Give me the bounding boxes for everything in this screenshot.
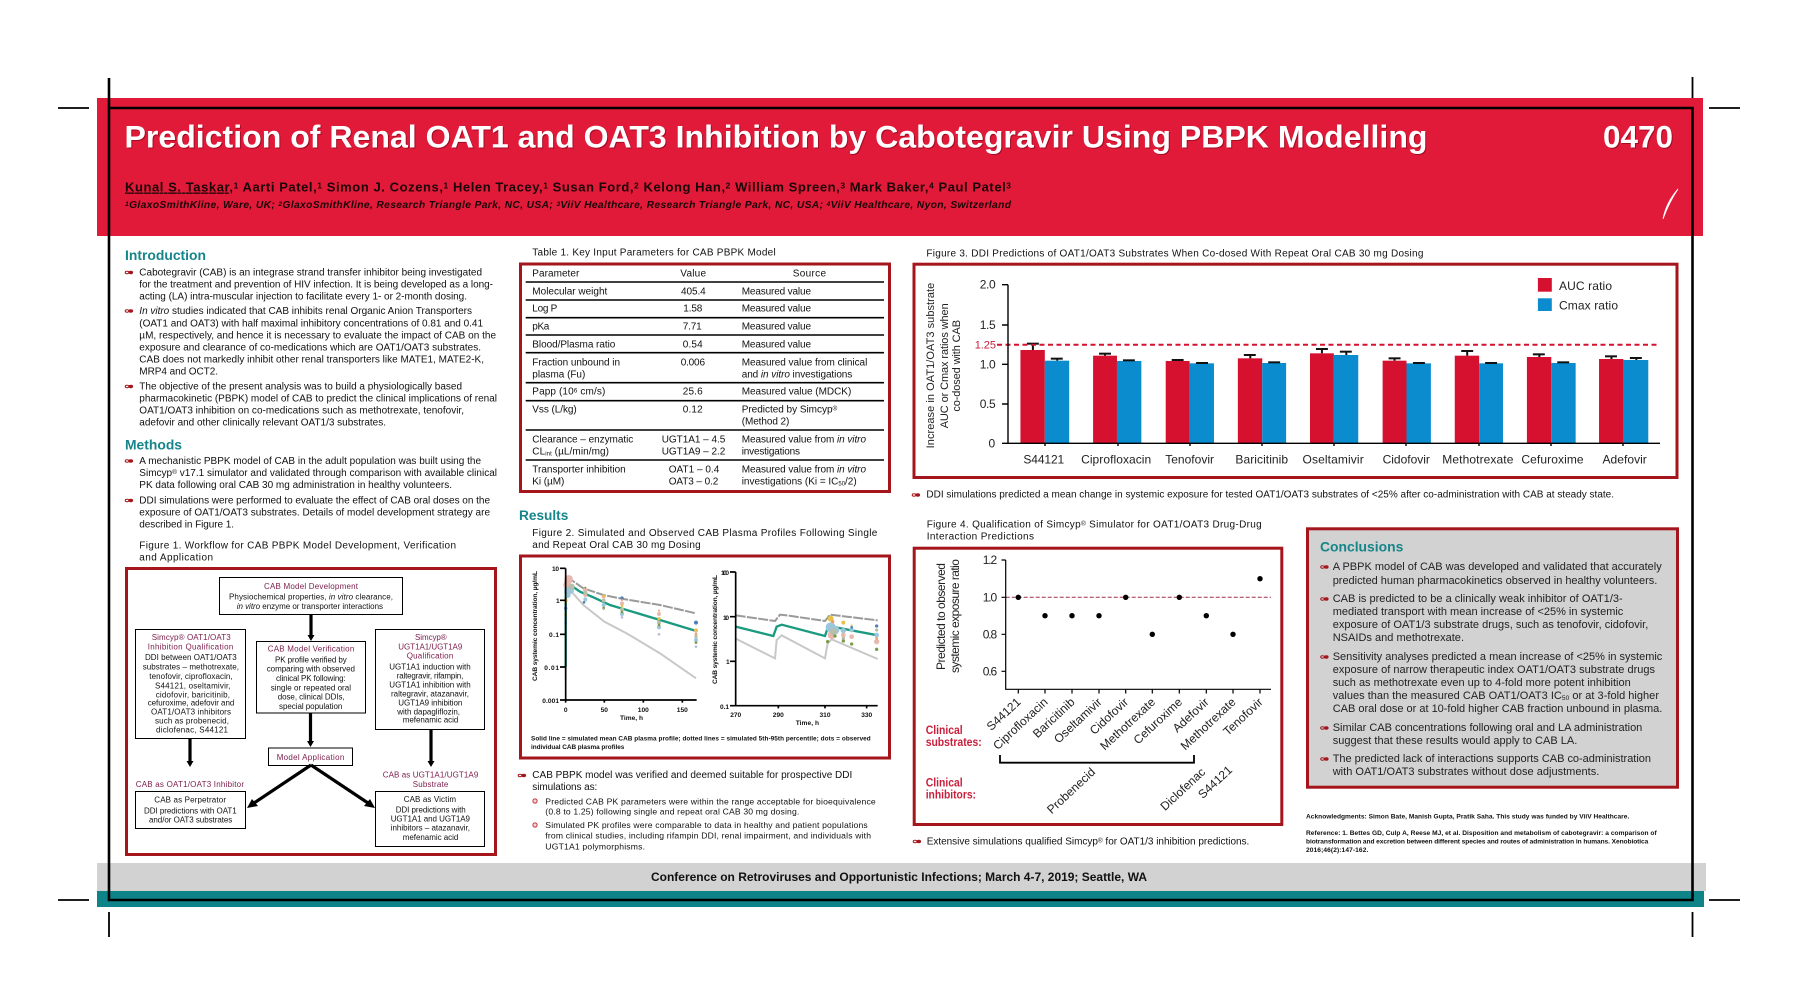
y axis tick labels: 10 [552, 566, 559, 573]
y axis tick labels: 0.1 [549, 632, 559, 639]
table rows: Transporter inhibition [532, 465, 626, 476]
header band [97, 98, 1703, 236]
table rows: Measured value [742, 322, 811, 333]
references [1306, 830, 1657, 854]
panel: table 1 key input parameters [520, 264, 890, 492]
figure 1 caption [139, 541, 456, 564]
data points: repeat dose [826, 616, 879, 651]
panel: conclusions: mediated transport with mean increase of <25% in systemic [1333, 606, 1624, 618]
x axis tick labels: 270 [730, 712, 742, 719]
y axis tick labels: 0.8 [983, 627, 998, 641]
box: Simcyp OAT qualification: Simcyp® OAT1/OAT3 [152, 633, 231, 642]
table rows: 0.006 [681, 358, 705, 369]
y axis tick labels: 0 [988, 436, 996, 450]
label: CAB as substrate: Substrate [413, 780, 449, 789]
panel: introduction: pharmacokinetic (PBPK) model of CAB to predict the clinical implications of renal [139, 393, 497, 404]
panel: conclusions: predicted human pharmacokinetics observed in healthy volunteers. [1333, 575, 1657, 587]
y axis tick labels: 0.01 [544, 665, 559, 672]
box: Simcyp OAT qualification: S44121, oseltamivir, [155, 681, 231, 690]
legend [1538, 278, 1618, 312]
line: 5th percentile [736, 635, 878, 659]
data points [1016, 576, 1263, 637]
box: CAB as perpetrator: DDI predictions with OAT1 [144, 806, 237, 815]
panel: conclusions: suggest that these results would apply to CAB LA. [1333, 735, 1577, 747]
line: simulated mean [736, 625, 878, 636]
box: Simcyp UGT qualification: UGT1A9 inhibition [398, 698, 462, 707]
x axis category labels [1023, 452, 1647, 466]
box: CAB model verification: dose, clinical DDIs, [278, 693, 345, 702]
panel: conclusions: such as methotrexate even up to 4-fold more potent inhibition [1333, 677, 1631, 689]
panel: conclusions: with OAT1/OAT3 substrates without dose adjustments. [1332, 766, 1599, 778]
panel: conclusions: NSAIDs and methotrexate. [1333, 632, 1464, 644]
panel: conclusions: CAB is predicted to be a clinically weak inhibitor of OAT1/3- [1333, 593, 1623, 605]
line: 5th percentile [566, 585, 696, 680]
box: CAB as perpetrator: and/or OAT3 substrates [149, 816, 232, 825]
table rows: 0.12 [683, 405, 703, 416]
chart: repeat dose profile [712, 570, 879, 727]
x axis tick labels [564, 707, 688, 722]
box: Simcyp UGT qualification: UGT1A1 inhibition with [389, 681, 471, 690]
x axis tick labels: 100 [638, 707, 649, 714]
table rows: CLint (µL/min/mg) [532, 447, 609, 458]
references: biotransformation and excretion between different species and routes of administration in humans. Xenobiotica [1306, 838, 1649, 845]
line: simulated mean [566, 582, 695, 667]
table rows: Clearance – enzymatic [532, 435, 633, 446]
box: Simcyp UGT qualification [376, 630, 484, 730]
y axis tick labels: 1 [726, 659, 730, 666]
panel: methods: exposure of OAT1/OAT3 substrates. Details of model development strategy are [139, 507, 490, 518]
box: CAB model verification: PK profile verified by [275, 656, 347, 665]
authors: Kunal S. Taskar,1 Aarti Patel,1 Simon J. Cozens,1 Helen Tracey,1 Susan Ford,2 Kelong Han,2 William Spreen,3 Mark Baker,4 Paul Patel3 [125, 180, 1011, 194]
x axis category labels: Adefovir [1602, 452, 1647, 466]
clinical substrate labels: Adefovir [1170, 695, 1212, 735]
x axis category labels: Oseltamivir [1302, 452, 1364, 466]
sub-bullet: bioequivalence: (0.8 to 1.25) following single and repeat oral CAB 30 mg dosing. [545, 807, 799, 817]
label: CAB as substrate: CAB as UGT1A1/UGT1A9 [383, 771, 479, 780]
chart: single dose profile [532, 566, 698, 722]
poster number: 0470 [1603, 118, 1673, 154]
box: Simcyp UGT qualification: with dapagliflozin, [396, 707, 460, 716]
box: CAB model verification [256, 642, 366, 713]
title: Prediction of Renal OAT1 and OAT3 Inhibition by Cabotegravir Using PBPK Modelling [124, 118, 1428, 154]
acknowledgments: Acknowledgments: Simon Bate, Manish Gupta, Pratik Saha. This study was funded by ViiV Healthcare. [1306, 814, 1629, 821]
panel: introduction: CAB does not markedly inhibit other renal transporters like MATE1, MATE2-K, [139, 354, 484, 365]
panel: conclusions: values than the measured CAB OAT1/OAT3 IC50 or at 3-fold higher [1333, 690, 1659, 702]
text block: results bullets [518, 770, 876, 851]
x axis tick labels: 150 [677, 707, 688, 714]
y axis tick labels: 1.5 [980, 318, 996, 332]
box: Simcyp OAT qualification: Inhibition Qualification [148, 642, 233, 651]
box: model application: Model Application [277, 753, 344, 762]
legend: Cmax ratio [1559, 298, 1618, 312]
heading: conclusions: Conclusions [1320, 540, 1403, 555]
label: CAB as inhibitor: CAB as OAT1/OAT3 Inhibitor [136, 780, 244, 789]
references: Reference: 1. Bettes GD, Culp A, Reese MJ, et al. Disposition and metabolism of cabotegravir: a comparison of [1306, 830, 1657, 837]
threshold line 1.25 [997, 344, 1660, 346]
y axis tick labels: 1.0 [983, 590, 998, 604]
y axis title: co-dosed with CAB [951, 320, 963, 412]
references: 2016;46(2):147-162. [1306, 847, 1368, 854]
table header: Parameter [532, 269, 580, 280]
panel: figure 4 dot plot [914, 548, 1282, 824]
table rows: Molecular weight [532, 287, 608, 298]
y axis tick labels: 0.6 [983, 664, 998, 678]
page frame and crop marks [58, 77, 1740, 937]
x axis tick labels: 330 [861, 712, 873, 719]
panel: introduction: for the treatment and prevention of HIV infection. It is being developed as a long- [139, 279, 493, 290]
table rows: OAT1 – 0.4 [669, 465, 720, 476]
sub-bullet: bioequivalence: Predicted CAB PK parameters were within the range acceptable for bioequivalence [545, 797, 876, 807]
y axis tick labels: 10 [723, 615, 729, 622]
x axis category labels: Cidofovir [1383, 452, 1430, 466]
box: CAB model development: CAB Model Development [264, 582, 359, 591]
x axis tick labels [730, 712, 873, 727]
box: Simcyp OAT qualification: DDI between OAT1/OAT3 [145, 653, 237, 662]
table rows: Measured value (MDCK) [742, 387, 851, 398]
x axis category labels: Baricitinib [1235, 452, 1288, 466]
figure 1 caption: Figure 1. Workflow for CAB PBPK Model Development, Verification [139, 541, 456, 552]
y axis title: systemic exposure ratio [948, 559, 962, 673]
x axis category labels: S44121 [1023, 452, 1065, 466]
clinical inhibitor labels: S44121 [1195, 763, 1235, 801]
heading: clinical substrates [926, 725, 982, 749]
y axis tick labels: 0.1 [720, 704, 729, 711]
heading: clinical inhibitors: Clinical [926, 778, 963, 790]
box: Simcyp OAT qualification: OAT1/OAT3 inhibitors [151, 708, 231, 716]
line: 95th percentile [736, 615, 878, 621]
figure 4 caption [927, 519, 1262, 543]
x axis category labels: Cefuroxime [1521, 452, 1584, 466]
box: Simcyp UGT qualification: raltegravir, rifampin, [397, 672, 463, 681]
heading: methods: Methods [125, 437, 182, 452]
box: CAB as victim [376, 792, 484, 846]
clinical substrate labels: Tenofovir [1220, 695, 1266, 738]
sub-bullet: bioequivalence [533, 797, 876, 817]
y axis title: CAB systemic concentration, µg/mL [532, 571, 539, 681]
table rows: pKa [532, 322, 550, 333]
box: CAB as perpetrator [136, 792, 246, 828]
chart footnote: Solid line = simulated mean CAB plasma profile; dotted lines = simulated 5th-95th percentile; dots = observed [531, 736, 871, 743]
y axis tick labels [975, 278, 996, 450]
box: Simcyp OAT qualification: such as probenecid, [155, 716, 229, 726]
table rows: and in vitro investigations [742, 370, 852, 381]
table rows: UGT1A1 – 4.5 [662, 435, 726, 446]
y axis title [925, 283, 963, 448]
y axis title [934, 559, 962, 673]
y axis title: Predicted to observed [934, 563, 948, 670]
panel: methods: PK data following oral CAB 30 mg administration in healthy volunteers. [139, 480, 452, 491]
panel: introduction: exposure and clearance of co-medications which are OAT1/OAT3 substrates. [139, 342, 481, 353]
box: CAB model development: in vitro enzyme or transporter interactions [237, 602, 383, 611]
axes [1002, 285, 1660, 446]
box: Simcyp OAT qualification [136, 630, 246, 738]
panel: introduction: (OAT1 and OAT3) with half maximal inhibitory concentrations of 0.81 and 0.41 [139, 318, 483, 329]
clinical inhibitor labels [1044, 763, 1235, 817]
table rows: Vss (L/kg) [532, 405, 577, 416]
panel: conclusions: exposure of OAT1/3 substrate drugs, such as tenofovir, cidofovir, [1333, 619, 1648, 631]
box: CAB model verification: single or repeated oral [271, 683, 351, 692]
y axis tick labels [542, 566, 560, 705]
text block: figure 3 takeaway: DDI simulations predicted a mean change in systemic exposure for tested OAT1/OAT3 substrates of <25% after co-administration with CAB at steady state. [926, 490, 1614, 501]
y axis tick labels [983, 553, 998, 678]
icon: logo swoosh [1663, 189, 1678, 219]
figure 2 caption [532, 528, 878, 551]
box: CAB model development: Physiochemical properties, in vitro clearance, [229, 592, 393, 601]
table rows: 0.54 [683, 340, 703, 351]
x axis tick labels: 310 [819, 712, 831, 719]
table rows: Measured value from in vitro [742, 435, 866, 446]
y axis tick labels: 2.0 [980, 278, 996, 292]
affiliations: 1GlaxoSmithKline, Ware, UK; 2GlaxoSmithKline, Research Triangle Park, NC, USA; 3ViiV Healthcare, Research Triangle Park, NC, USA; 4ViiV Healthcare, Nyon, Switzerland [125, 200, 1012, 211]
figure 4 caption: Interaction Predictions [927, 532, 1034, 543]
box: CAB as victim: inhibitors – atazanavir, [391, 824, 470, 833]
x axis tick labels: 290 [773, 712, 784, 719]
heading: clinical substrates: substrates: [926, 737, 982, 749]
table rows: Measured value [742, 340, 811, 351]
clinical substrate labels: S44121 [984, 695, 1024, 733]
heading: results: Results [519, 508, 568, 523]
y axis tick labels: 1.0 [980, 357, 996, 371]
panel: figure 3 bar chart [914, 264, 1677, 478]
x axis tick labels: Time, h [796, 720, 819, 727]
text block: figure 4 takeaway: Extensive simulations qualified Simcyp® for OAT1/3 inhibition predictions. [927, 836, 1249, 847]
panel: figure 2 plasma profiles [520, 556, 890, 758]
panel: conclusions: Similar CAB concentrations following oral and LA administration [1333, 722, 1642, 734]
box: CAB model verification: comparing with observed [267, 665, 355, 674]
y axis tick labels: 100 [721, 570, 729, 577]
panel: introduction: In vitro studies indicated that CAB inhibits renal Organic Anion Transporters [139, 306, 472, 317]
panel: conclusions: Sensitivity analyses predicted a mean increase of <25% in systemic [1333, 651, 1663, 663]
table rows: Log P [532, 304, 558, 315]
panel: methods: DDI simulations were performed to evaluate the effect of CAB oral doses on the [139, 495, 490, 506]
x axis tick labels: Time, h [620, 715, 643, 722]
table rows: Measured value [742, 287, 811, 298]
panel: conclusions: A PBPK model of CAB was developed and validated that accurately [1333, 561, 1662, 573]
y axis title: CAB systemic concentration, µg/mL [712, 575, 719, 684]
box: CAB model development [220, 578, 402, 614]
box: CAB as victim: mefenamic acid [403, 833, 458, 842]
table header: Source [793, 269, 826, 280]
panel: methods: described in Figure 1. [139, 519, 234, 530]
panel: methods: Simcyp® v17.1 simulator and validated through comparison with available clinical [139, 468, 497, 479]
box: Simcyp UGT qualification: mefenamic acid [403, 716, 458, 725]
line: 95th percentile [567, 577, 696, 613]
panel: introduction: Cabotegravir (CAB) is an integrase strand transfer inhibitor being investigated [139, 267, 482, 278]
table 1 caption: Table 1. Key Input Parameters for CAB PBPK Model [532, 248, 776, 259]
panel: conclusions: CAB oral dose or at 10-fold higher CAB fraction unbound in plasma. [1333, 703, 1662, 715]
axes [560, 568, 697, 703]
box: CAB model verification: clinical PK following: [276, 674, 346, 683]
footer band: teal [97, 891, 1704, 907]
figure 2 caption: and Repeat Oral CAB 30 mg Dosing [532, 540, 701, 551]
panel: methods: A mechanistic PBPK model of CAB in the adult population was built using the [139, 456, 481, 467]
footer band: grey [97, 863, 1706, 891]
box: CAB model verification: CAB Model Verification [268, 645, 354, 654]
arrows: workflow connectors [186, 614, 434, 808]
y axis tick labels [720, 570, 730, 711]
x axis tick labels: 50 [601, 707, 608, 714]
clinical substrate labels: Oseltamivir [1051, 695, 1105, 746]
sub-bullet: simulated profiles: Simulated PK profiles were comparable to data in healthy and patient populations [545, 820, 868, 830]
table rows: Predicted by Simcyp® [742, 404, 838, 416]
text block: results bullets: simulations as: [532, 782, 597, 793]
sub-bullet: simulated profiles [533, 820, 871, 851]
chart footnote: individual CAB plasma profiles [531, 744, 625, 751]
figure 1 caption: and Application [139, 553, 213, 564]
clinical substrate labels: Methotrexate [1178, 695, 1239, 753]
x axis category labels: Ciprofloxacin [1081, 452, 1151, 466]
clinical inhibitor labels: Probenecid [1044, 765, 1098, 817]
heading: clinical inhibitors [926, 778, 976, 802]
panel: introduction: adefovir and other clinically relevant OAT1/3 substrates. [139, 417, 386, 428]
clinical inhibitor labels: Diclofenac [1158, 765, 1208, 813]
label: CAB as substrate [383, 771, 479, 789]
heading: introduction: Introduction [125, 248, 206, 263]
panel: conclusions [1308, 529, 1678, 787]
table header: Value [680, 269, 706, 280]
figure 2 caption: Figure 2. Simulated and Observed CAB Plasma Profiles Following Single [532, 528, 878, 539]
table rows: Measured value from clinical [742, 358, 867, 369]
sub-bullet: simulated profiles: UGT1A1 polymorphisms. [545, 841, 645, 851]
text block: results bullets: CAB PBPK model was verified and deemed suitable for prospective DDI [532, 770, 852, 781]
chart footnote [531, 736, 871, 751]
clinical substrate labels: Baricitinib [1030, 695, 1078, 741]
box: Simcyp UGT qualification: UGT1A1/UGT1A9 [398, 642, 463, 651]
panel: introduction: The objective of the present analysis was to build a physiologically based [139, 381, 462, 392]
bars [1020, 343, 1648, 443]
legend: AUC ratio [1559, 279, 1612, 293]
box: Simcyp OAT qualification: cefuroxime, adefovir and [148, 698, 234, 708]
box: Simcyp OAT qualification: cidofovir, baricitinib, [156, 691, 230, 700]
table rows: (Method 2) [742, 417, 789, 428]
table rows: 405.4 [681, 287, 706, 298]
box: Simcyp UGT qualification: raltegravir, atazanavir, [391, 690, 469, 699]
x axis category labels: Tenofovir [1165, 452, 1214, 466]
box: Simcyp UGT qualification: Qualification [407, 652, 453, 661]
panel: conclusions: The predicted lack of interactions supports CAB co-administration [1333, 753, 1651, 765]
conference footer: Conference on Retroviruses and Opportunistic Infections; March 4-7, 2019; Seattle, WA [651, 870, 1147, 884]
table rows: OAT3 – 0.2 [669, 477, 719, 488]
clinical substrate labels: Cidofovir [1087, 695, 1131, 737]
sub-bullet: simulated profiles: from clinical studies, including rifampin DDI, renal impairment, and individuals with [545, 830, 871, 840]
box: Simcyp OAT qualification: tenofovir, ciprofloxacin, [149, 672, 233, 681]
table rows: Papp (106 cm/s) [532, 387, 605, 398]
y axis tick labels: 1.25 [975, 340, 996, 352]
panel: introduction: acting (LA) intra-muscular injection to facilitate every 1- or 2-month dosing. [139, 291, 467, 302]
table rows: investigations (Ki = IC50/2) [742, 477, 857, 488]
y axis tick labels: 1.2 [983, 553, 998, 567]
y axis tick labels: 0.001 [542, 698, 559, 705]
table rows: UGT1A9 – 2.2 [662, 447, 726, 458]
figure 4 caption: Figure 4. Qualification of Simcyp® Simulator for OAT1/OAT3 Drug-Drug [927, 519, 1262, 531]
panel: methods [125, 437, 497, 530]
box: CAB as perpetrator: CAB as Perpetrator [154, 796, 226, 805]
y axis tick labels: 0.5 [980, 397, 996, 411]
box: CAB as victim: DDI predictions with [396, 806, 466, 815]
y axis title: Increase in OAT1/OAT3 substrate [925, 283, 937, 448]
box: CAB model verification: special population [279, 702, 342, 711]
table rows: Fraction unbound in [532, 358, 620, 369]
x axis category labels: Methotrexate [1442, 452, 1514, 466]
clinical substrate labels: Ciprofloxacin [990, 695, 1051, 753]
table rows: Blood/Plasma ratio [532, 340, 616, 351]
y axis title: AUC or Cmax ratios when [939, 303, 951, 428]
panel: introduction: OAT1/OAT3 inhibition on co-medications such as methotrexate, tenofovir, [139, 405, 464, 416]
table rows: 1.58 [683, 304, 703, 315]
table rows: 25.6 [683, 387, 703, 398]
bracket: probenecid group [1000, 755, 1194, 763]
clinical substrate labels [984, 695, 1266, 753]
clinical substrate labels: Cefuroxime [1131, 695, 1185, 747]
box: CAB as victim: CAB as Victim [404, 795, 456, 804]
box: Simcyp OAT qualification: substrates – methotrexate, [143, 662, 239, 671]
heading: clinical substrates: Clinical [926, 725, 963, 737]
heading: clinical inhibitors: inhibitors: [926, 790, 976, 802]
table header [532, 269, 826, 280]
box: Simcyp OAT qualification: diclofenac, S44121 [156, 726, 229, 734]
box: Simcyp UGT qualification: UGT1A1 induction with [389, 662, 471, 671]
table rows: Measured value from in vitro [742, 465, 866, 476]
table rows: investigations [742, 447, 800, 458]
axes [730, 572, 878, 708]
data points: single dose [563, 575, 698, 648]
box: CAB as victim: UGT1A1 and UGT1A9 [391, 815, 471, 824]
panel: conclusions: exposure of narrow therapeutic index OAT1/OAT3 substrate drugs [1333, 664, 1656, 676]
reference line [1006, 596, 1271, 598]
panel: introduction: µM, respectively, and hence it is necessary to evaluate the impact of CAB on the [139, 330, 496, 341]
x axis tick labels: 0 [564, 707, 568, 714]
box: model application [268, 748, 352, 766]
panel: introduction: MRP4 and OCT2. [139, 366, 218, 377]
table rows [532, 287, 867, 488]
figure 3 caption: Figure 3. DDI Predictions of OAT1/OAT3 Substrates When Co-dosed With Repeat Oral CAB 30 mg Dosing [926, 249, 1423, 260]
panel: introduction [125, 248, 497, 428]
table rows: plasma (Fu) [532, 370, 585, 381]
table rows: 7.71 [683, 322, 702, 333]
table rows: Measured value [742, 304, 811, 315]
table rows: Ki (µM) [532, 477, 564, 488]
box: Simcyp UGT qualification: Simcyp® [415, 633, 447, 642]
y axis tick labels: 1 [556, 598, 560, 605]
clinical substrate labels: Methotrexate [1097, 695, 1158, 753]
axes [1002, 560, 1271, 694]
panel: figure 1 workflow [126, 568, 496, 854]
